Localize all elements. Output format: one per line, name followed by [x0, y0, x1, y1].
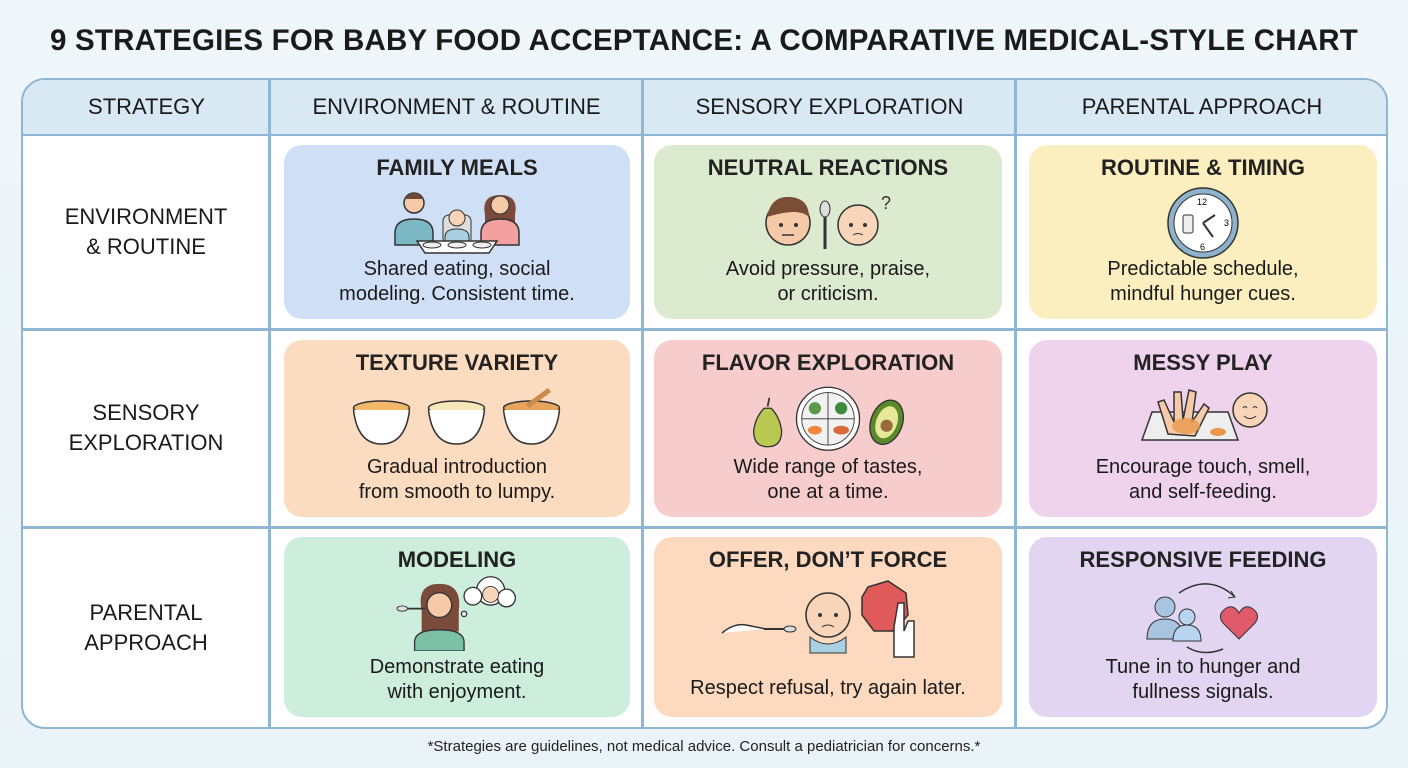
card: family meals: Shared eating, social [364, 258, 550, 280]
header: sensory: SENSORY EXPLORATION [696, 94, 963, 119]
card: routine & timing [1029, 145, 1377, 319]
card: offer don't force: OFFER, DON’T FORCE [709, 547, 947, 572]
card: texture variety: Gradual introduction [367, 456, 547, 478]
footer note: *Strategies are guidelines, not medical advice. Consult a pediatrician for concerns.* [428, 738, 980, 755]
card: neutral reactions [654, 145, 1002, 319]
card: neutral reactions: Avoid pressure, praise, [726, 258, 930, 280]
card: flavor exploration [654, 340, 1002, 517]
card: texture variety [284, 340, 630, 517]
card: messy play [1029, 340, 1377, 517]
row label 2: SENSORY [92, 400, 200, 425]
row label 2 [69, 400, 223, 455]
card: responsive feeding [1029, 537, 1377, 717]
card: flavor exploration: FLAVOR EXPLORATION [702, 350, 954, 375]
card: modeling: with enjoyment. [388, 681, 526, 703]
card: routine & timing: mindful hunger cues. [1110, 283, 1296, 305]
card: family meals: modeling. Consistent time. [339, 283, 575, 305]
card: routine & timing: ROUTINE & TIMING [1101, 155, 1305, 180]
header: environment: ENVIRONMENT & ROUTINE [312, 94, 601, 119]
card: neutral reactions: NEUTRAL REACTIONS [708, 155, 948, 180]
card: routine & timing: 6 [1200, 242, 1205, 252]
title: 9 STRATEGIES FOR BABY FOOD ACCEPTANCE: A COMPARATIVE MEDICAL-STYLE CHART [50, 24, 1358, 57]
row label 3: APPROACH [84, 630, 208, 655]
header: strategy [23, 80, 270, 136]
card: messy play: Encourage touch, smell, [1096, 456, 1310, 478]
card: offer don't force [654, 537, 1002, 717]
card: flavor exploration: one at a time. [767, 481, 889, 503]
card: offer don't force: Respect refusal, try again later. [690, 677, 966, 699]
card: routine & timing: Predictable schedule, [1107, 258, 1299, 280]
row label 3: PARENTAL [90, 600, 202, 625]
card: routine & timing: 3 [1224, 218, 1229, 228]
row label 3 [84, 600, 208, 655]
card: neutral reactions: or criticism. [777, 283, 879, 305]
card: modeling: MODELING [398, 547, 516, 572]
row label 1: & ROUTINE [86, 234, 206, 259]
card: family meals [284, 145, 630, 319]
card: flavor exploration: Wide range of tastes, [734, 456, 922, 478]
row label 1: ENVIRONMENT [65, 204, 227, 229]
card: responsive feeding: fullness signals. [1132, 681, 1274, 703]
row label 1 [65, 204, 227, 259]
card: responsive feeding: RESPONSIVE FEEDING [1080, 547, 1326, 572]
card: messy play: MESSY PLAY [1133, 350, 1273, 375]
card: messy play: and self-feeding. [1129, 481, 1277, 503]
header: environment [270, 80, 643, 136]
header: strategy: STRATEGY [88, 94, 205, 119]
row label 2: EXPLORATION [69, 430, 223, 455]
card: neutral reactions: ? [881, 193, 891, 213]
card: modeling: Demonstrate eating [370, 656, 544, 678]
header: sensory [643, 80, 1016, 136]
card: family meals: FAMILY MEALS [376, 155, 538, 180]
header: parental [1016, 80, 1388, 136]
card: texture variety: TEXTURE VARIETY [356, 350, 558, 375]
card: routine & timing: 12 [1197, 197, 1207, 207]
card: modeling [284, 537, 630, 717]
header: parental: PARENTAL APPROACH [1082, 94, 1322, 119]
card: responsive feeding: Tune in to hunger and [1106, 656, 1300, 678]
card: texture variety: from smooth to lumpy. [359, 481, 555, 503]
